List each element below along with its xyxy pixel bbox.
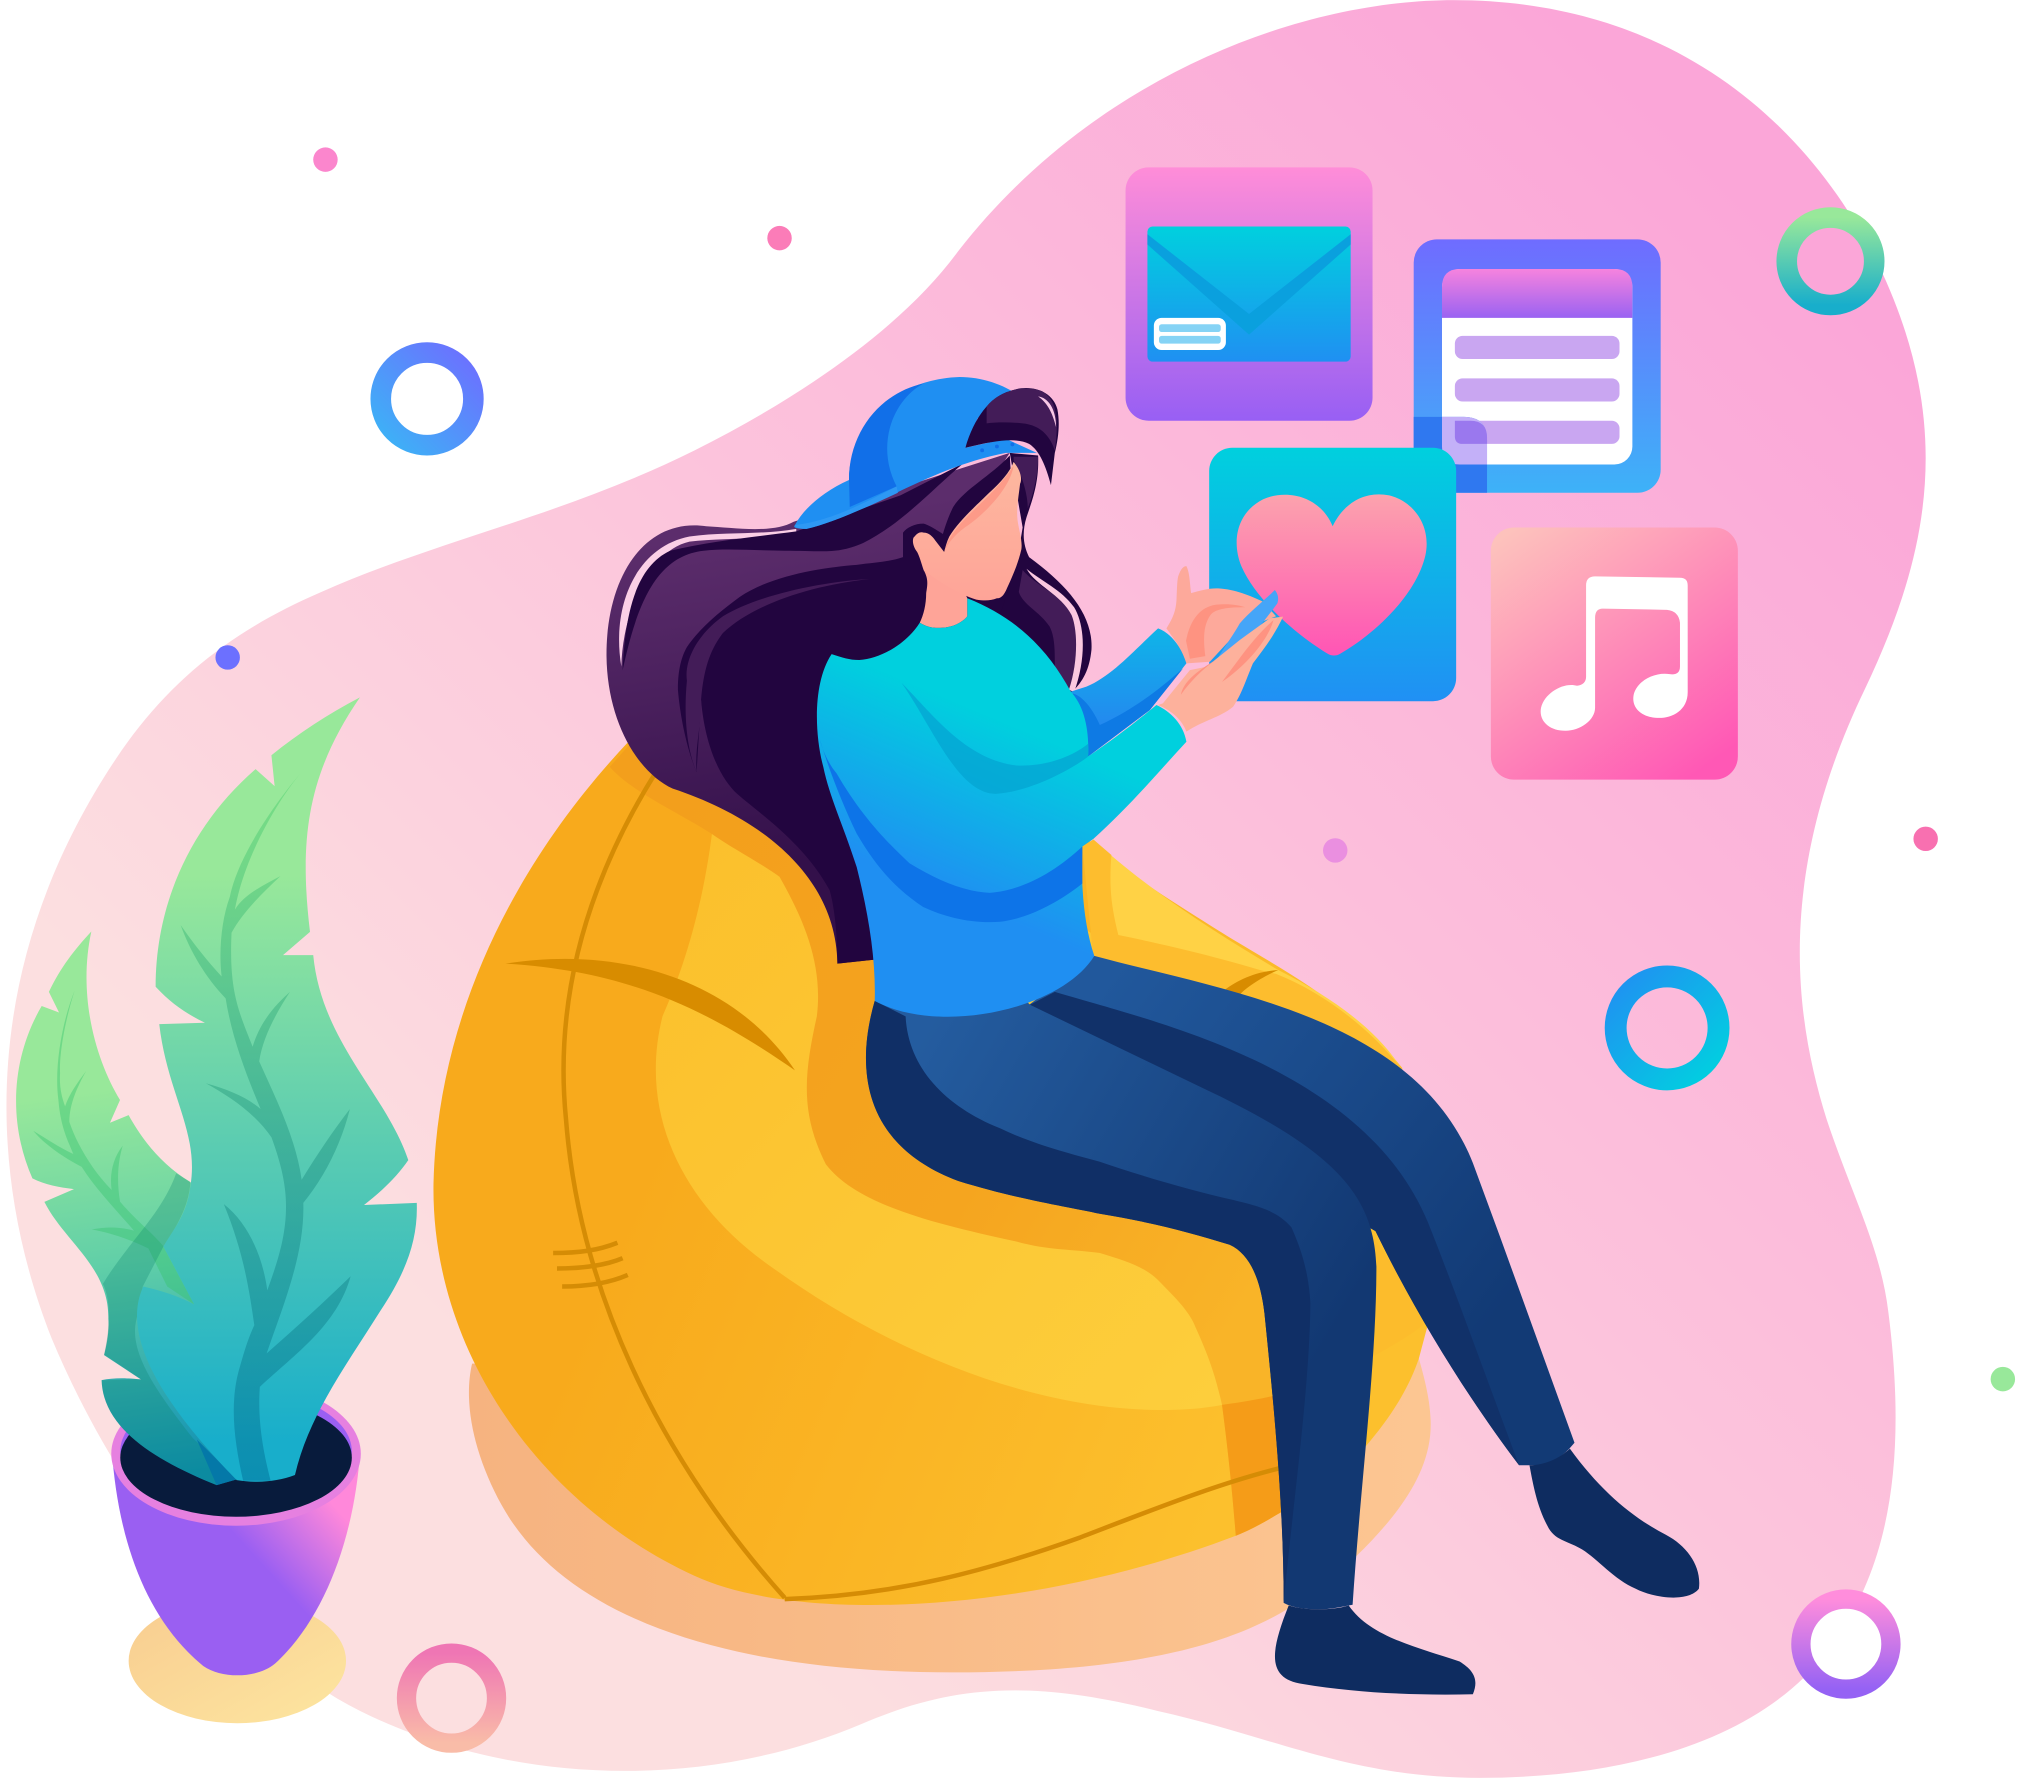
- sleeve: back arm: [1071, 628, 1186, 757]
- front leg: [866, 991, 1376, 1609]
- hair: top over cap: [965, 388, 1059, 485]
- card: document: [1414, 239, 1661, 493]
- darker seat edge: [610, 744, 1338, 1536]
- hair: dark upper band: [623, 463, 963, 670]
- crease left: [506, 959, 795, 1070]
- phone: [1210, 590, 1278, 672]
- pot shadow: [129, 1598, 346, 1723]
- hair: outer mass: [607, 453, 1010, 964]
- skin: face and neck: [913, 462, 1022, 628]
- seams: [553, 772, 1286, 1599]
- card: heart: [1209, 448, 1456, 701]
- back leg: [1029, 956, 1574, 1465]
- crease right: [1222, 970, 1278, 997]
- lower dark corner: [1222, 1391, 1293, 1536]
- decorative dots: [215, 147, 2015, 1391]
- plant: front leaf: [137, 697, 417, 1482]
- top right shoulder of bag: [1093, 839, 1400, 1067]
- back leg shadow: [1030, 992, 1519, 1465]
- bean bag: [433, 720, 1429, 1605]
- icon: heart: [1237, 494, 1427, 656]
- card: music: [1491, 528, 1738, 780]
- cap: [794, 377, 1037, 529]
- back leaf vein: [33, 991, 194, 1304]
- seat highlight: [656, 798, 1222, 1410]
- hand: front holding phone: [1158, 590, 1283, 732]
- hair: inner sliver: [686, 579, 870, 772]
- hair: highlight strip: [619, 529, 796, 666]
- sweatshirt: fold dark: [820, 740, 1082, 922]
- pot: [111, 1382, 361, 1675]
- bean bag shadow: [469, 1359, 1431, 1672]
- card: mail: [1126, 167, 1373, 421]
- icon: envelope: [1147, 227, 1351, 362]
- hand: back: [1166, 566, 1276, 663]
- socks: [1275, 1449, 1699, 1695]
- front leaf veins: [181, 767, 351, 1481]
- plant: back leaf: [16, 931, 237, 1485]
- hair: [607, 453, 1092, 964]
- right of leg: [1338, 1184, 1429, 1369]
- decorative rings: [381, 218, 1891, 1743]
- sweatshirt: [817, 598, 1186, 1017]
- hair: dark body: [678, 455, 1016, 964]
- icon: music notes: [1541, 576, 1688, 731]
- sweatshirt: fold light: [902, 683, 1088, 794]
- hair: right side: [971, 453, 1092, 692]
- front leg fold: [866, 1001, 1310, 1603]
- legs: [866, 956, 1574, 1609]
- back leaf shadow: [102, 1173, 237, 1485]
